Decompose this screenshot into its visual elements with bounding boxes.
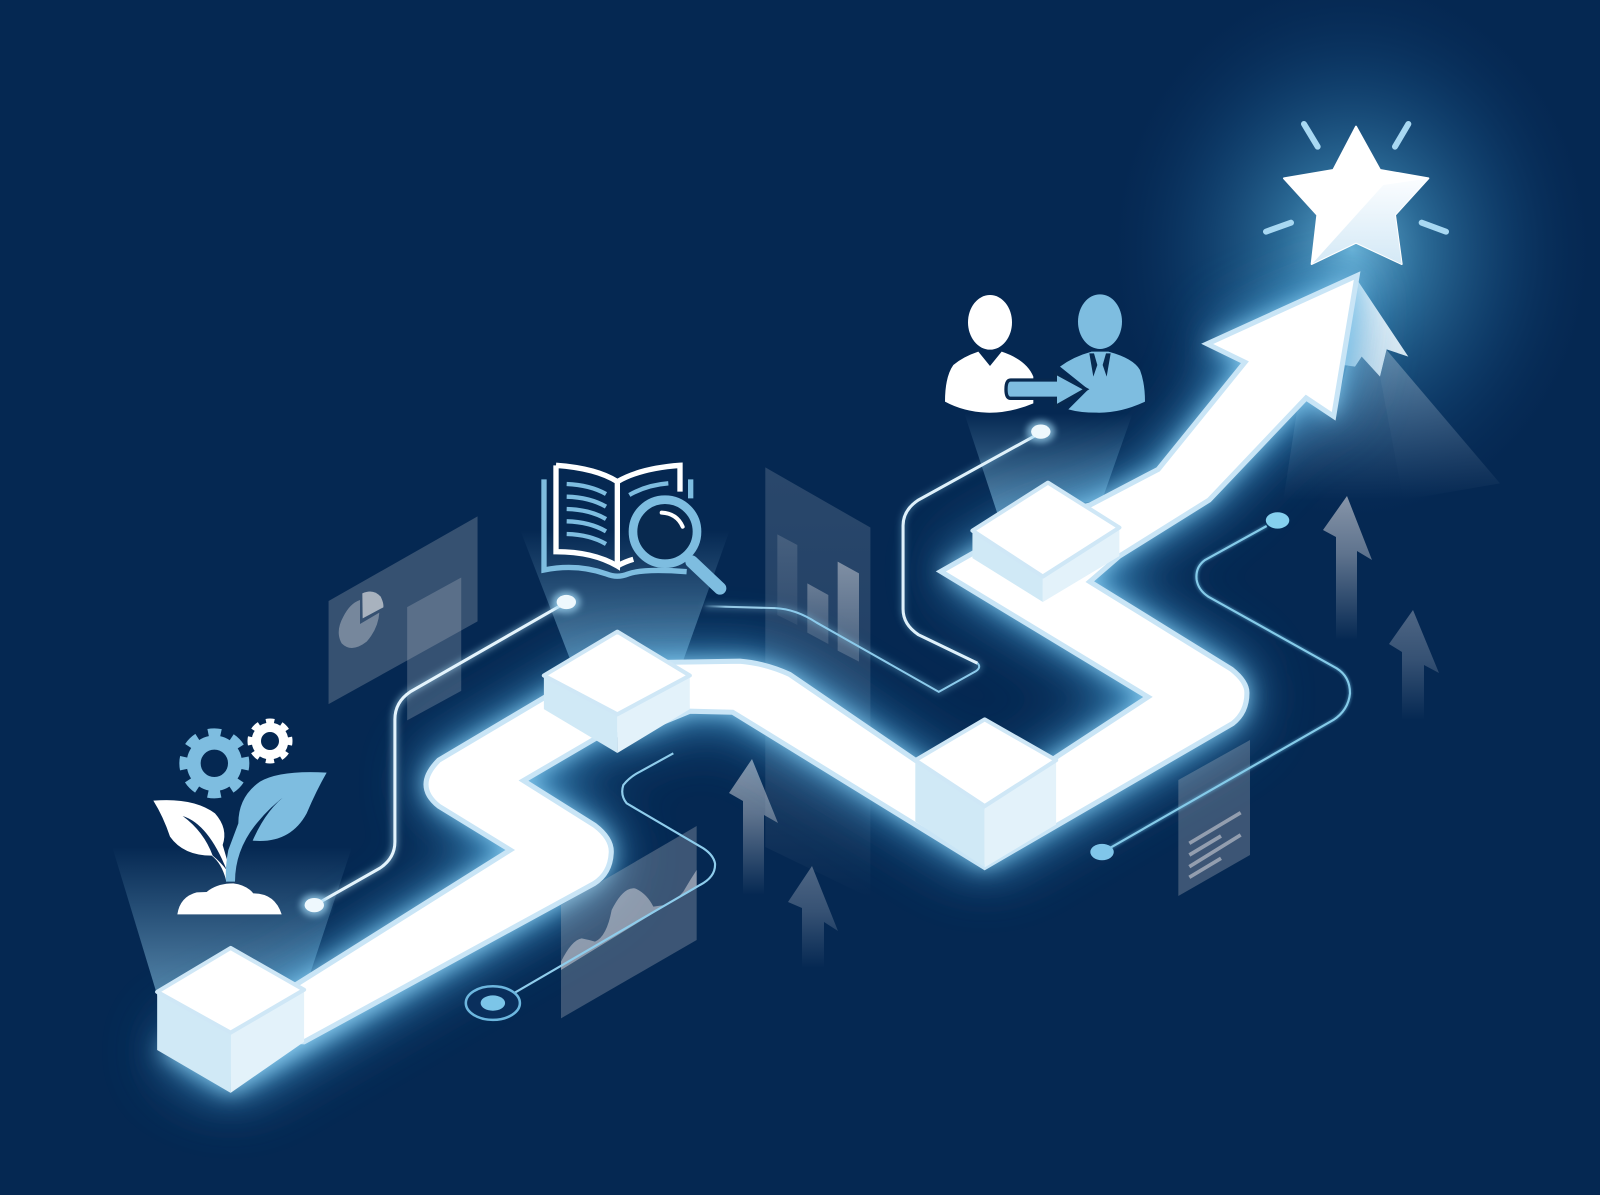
handoff arrow (1006, 373, 1086, 407)
path glow (157, 276, 1357, 1093)
light cone: book (520, 531, 730, 679)
magnifier (633, 500, 697, 564)
arrow tail beams (1283, 277, 1500, 500)
connector: plant to path (318, 604, 563, 903)
person blue (1060, 294, 1145, 413)
arrow: faded up arrow 1 (729, 759, 778, 895)
leaf vein (183, 816, 227, 870)
icon: open book with magnifier (544, 465, 720, 588)
area chart (561, 870, 697, 970)
icon: blue gear (184, 733, 245, 794)
icon: white leaf (153, 800, 230, 880)
panel: bar chart card (765, 467, 870, 898)
arrow: faded up arrow 4 (1389, 610, 1439, 720)
connector dot: book (552, 591, 581, 613)
cube: second step (544, 632, 690, 753)
cube: third step (915, 719, 1056, 867)
connector dot: right upper (1266, 512, 1289, 529)
light cone: people (964, 413, 1133, 515)
light cone: plant (112, 847, 352, 1005)
connector: right loop (1107, 526, 1350, 850)
book text lines (567, 483, 668, 544)
pie chart (339, 591, 383, 648)
rays (1266, 124, 1446, 232)
icon: plant and gears (153, 722, 327, 914)
document lines (1189, 813, 1241, 877)
icon: white gear (251, 722, 289, 760)
book cover (544, 479, 691, 576)
path ribbon (255, 276, 1357, 1042)
book pages (556, 465, 680, 566)
bars (777, 534, 859, 662)
panel: document card (1178, 740, 1250, 896)
arrow: faded up arrow 3 (1323, 496, 1372, 640)
star glow (1112, 0, 1592, 520)
connector dot: people (1027, 420, 1055, 443)
icon: blue leaf and stem (226, 772, 327, 882)
cube: start step (157, 948, 304, 1093)
person white (945, 295, 1033, 413)
connector dot: plant (300, 894, 329, 916)
arrow tail facet (1343, 277, 1408, 377)
panel: area chart card (561, 826, 697, 1018)
connector dot: right lower (1090, 844, 1114, 860)
icon: two people handoff (945, 294, 1145, 413)
target marker (466, 986, 520, 1020)
icon: star with rays (1266, 124, 1446, 264)
connector: people to mid path (704, 434, 1039, 692)
icon: soil mound (177, 883, 282, 914)
cube: fourth step (972, 483, 1119, 602)
arrow: faded up arrow 2 (788, 866, 838, 968)
connector: target to lower path (505, 753, 715, 998)
panel: pie chart card (329, 516, 478, 720)
star (1284, 127, 1428, 264)
star shaded facet (1313, 178, 1428, 264)
